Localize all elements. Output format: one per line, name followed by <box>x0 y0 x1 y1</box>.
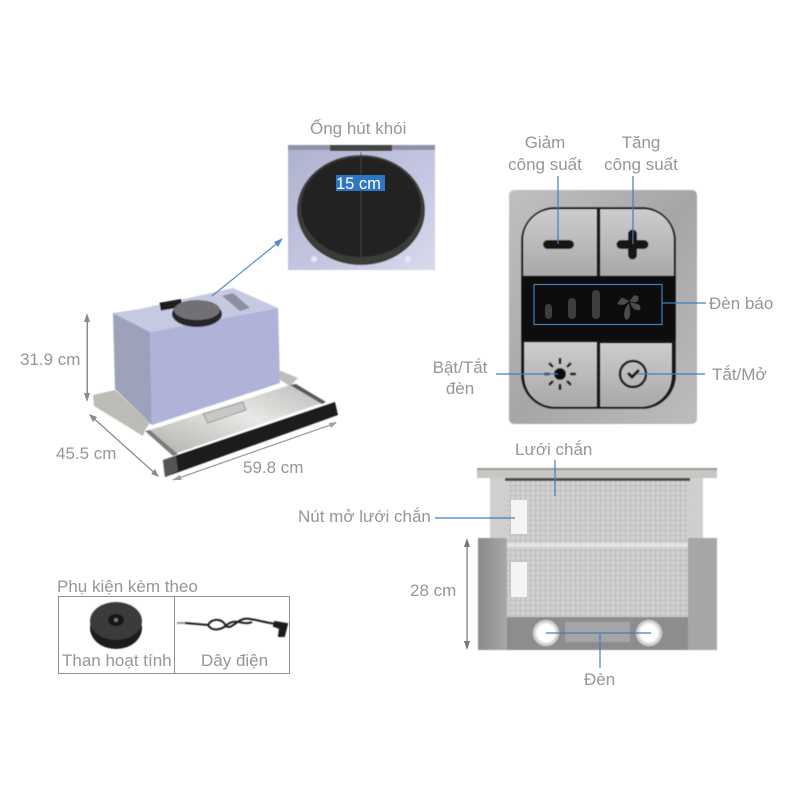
panel: exhaust duct inset <box>288 118 435 270</box>
accessories table <box>58 596 290 674</box>
lamp: left <box>532 620 560 646</box>
arrow: width 59.8 cm <box>172 422 337 480</box>
label: Nút mở lưới chắn: Nút mở lưới chắn <box>298 507 431 526</box>
button: decrease power <box>523 209 597 276</box>
latch: upper <box>511 500 527 534</box>
arrow: height 31.9 cm <box>84 313 90 402</box>
label: Tăng công suất: Tăng <box>622 133 660 152</box>
panel: underside view <box>298 440 717 689</box>
indicator strip <box>522 277 675 340</box>
panel: control panel <box>433 133 773 424</box>
callout lines: control panel <box>496 176 706 374</box>
label: Đèn: Đèn <box>584 670 615 689</box>
image: power cord <box>177 619 287 636</box>
lamp: right <box>636 620 662 646</box>
label: Than hoạt tính: Than hoạt tính <box>62 651 172 670</box>
label: 15 cm: 15 cm <box>336 175 381 193</box>
image: hood underside <box>477 468 717 650</box>
label: 45.5 cm: 45.5 cm <box>56 444 116 463</box>
label: Bật/Tắt đèn: đèn <box>446 379 474 398</box>
button: timer on/off <box>600 343 672 407</box>
button: light on/off <box>524 342 597 407</box>
label: Giảm công suất: công suất <box>508 155 582 174</box>
label: Đèn báo: Đèn báo <box>709 294 773 313</box>
image: duct opening <box>288 145 435 270</box>
label: Bật/Tắt đèn <box>433 358 488 398</box>
panel: range hood product with dimensions <box>20 288 338 480</box>
label: Lưới chắn: Lưới chắn <box>515 440 592 459</box>
callout line: duct <box>212 238 283 296</box>
arrow: depth 45.5 cm <box>89 414 159 477</box>
callout lines: underside <box>435 460 651 668</box>
label: Ống hút khói: Ống hút khói <box>310 118 406 138</box>
label: Bật/Tắt đèn: Bật/Tắt <box>433 358 488 377</box>
image: range hood <box>93 288 338 477</box>
image: steel plate <box>509 190 697 424</box>
heading: Phụ kiện kèm theo: Phụ kiện kèm theo <box>57 577 198 596</box>
label: 59.8 cm: 59.8 cm <box>243 458 303 477</box>
latch: lower <box>511 562 527 597</box>
label: 28 cm: 28 cm <box>410 581 456 600</box>
button: increase power <box>600 209 674 276</box>
label: Dây điện: Dây điện <box>201 651 268 670</box>
label: Giảm công suất <box>508 133 582 174</box>
label: 31.9 cm: 31.9 cm <box>20 350 80 369</box>
arrow: height 28 cm <box>464 538 470 650</box>
label: Tăng công suất: công suất <box>604 155 678 174</box>
label: Tăng công suất <box>604 133 678 174</box>
image: activated carbon filter <box>90 602 142 649</box>
label: Giảm công suất: Giảm <box>525 133 565 152</box>
panel: included accessories <box>57 577 290 674</box>
label: Tắt/Mở: Tắt/Mở <box>712 365 767 384</box>
